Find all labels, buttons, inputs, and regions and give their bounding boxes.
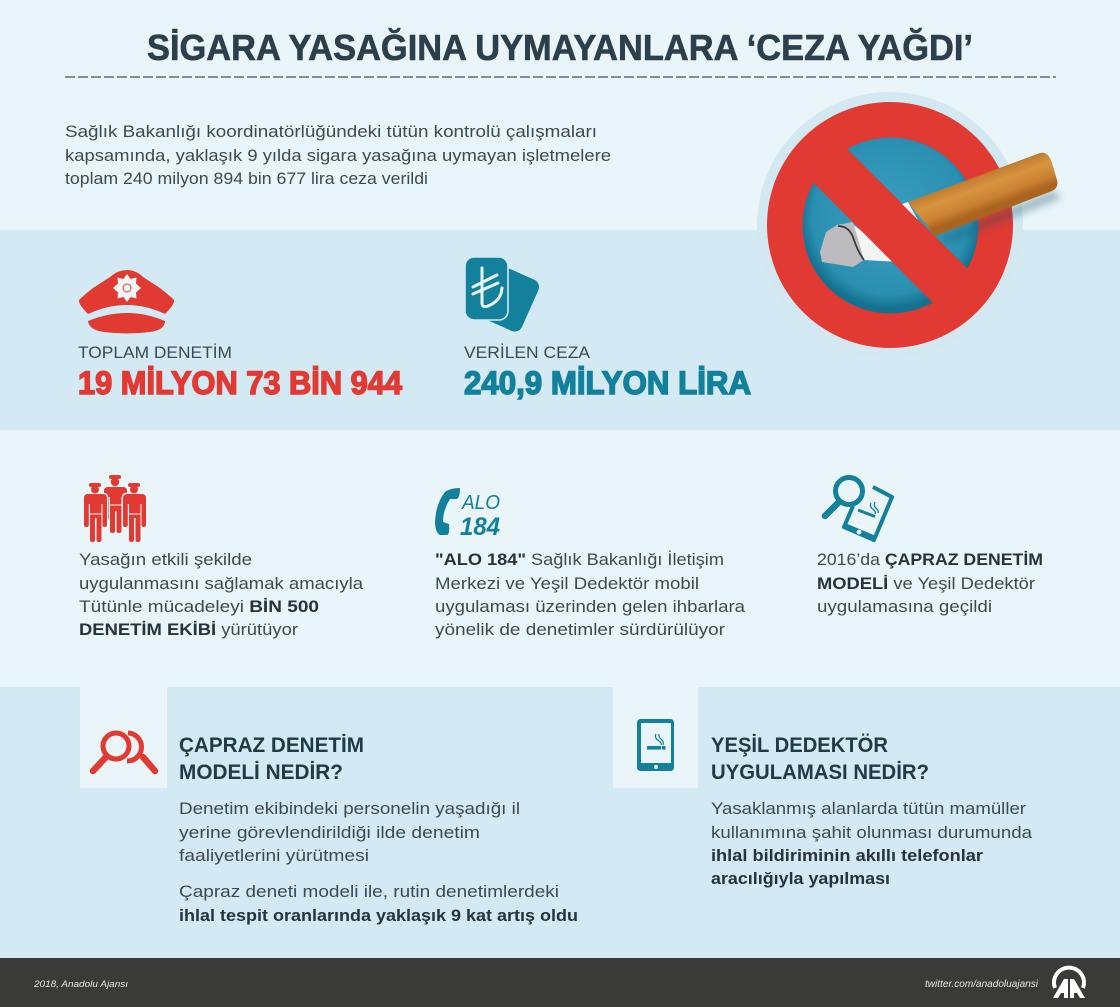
heading [711,734,929,784]
panel: green detector explanation [613,687,1033,888]
column: cross inspection [817,478,1043,616]
text [817,550,1043,616]
text: uygulanmasını sağlamak amacıyla [79,574,364,593]
heading: ÇAPRAZ DENETİM [179,734,364,757]
copyright: 2018, Anadolu Ajansı [33,979,128,990]
text: yönelik de denetimler sürdürülüyor [435,620,725,639]
icon: ALO 184 phone [435,488,500,541]
body text [179,799,578,925]
body text: Çapraz deneti modeli ile, rutin denetimlerdeki [179,882,559,901]
text: Yasağın etkili şekilde [79,550,252,569]
panel: top intro band [0,0,1120,230]
icon tab [80,687,167,788]
body text [711,799,1033,888]
icon: ALO 184 phone: 184 [460,513,500,541]
label: VERİLEN CEZA [464,343,591,362]
icon: magnifier over tablet [825,478,892,541]
number: 19 MİLYON 73 BİN 944 [78,365,402,401]
icon: three officers [84,475,146,542]
heading: YEŞİL DEDEKTÖR [711,734,888,757]
intro text: kapsamında, yaklaşık 9 yılda sigara yasağına uymayan işletmelere [65,146,611,165]
icon: smartphone with cigarette [637,719,674,771]
text: MODELİ ve Yeşil Dedektör [817,574,1035,593]
intro text: Sağlık Bakanlığı koordinatörlüğündeki tütün kontrolü çalışmaları [65,122,597,141]
body text: ihlal tespit oranlarında yaklaşık 9 kat artış oldu [179,906,578,925]
text: 2016’da ÇAPRAZ DENETİM [817,550,1043,569]
icon: lira notes [465,257,542,334]
body text: aracılığıyla yapılması [711,869,890,888]
intro text [65,122,611,188]
body text: yerine görevlendirildiği ilde denetim [179,823,480,842]
intro text: toplam 240 milyon 894 bin 677 lira ceza verildi [65,169,428,188]
text [435,550,746,639]
icon tab [613,687,698,788]
panel: explanations band [0,687,1120,958]
stat: total inspections [78,270,402,401]
panel: enforcement notes band [0,430,1120,687]
twitter handle: twitter.com/anadoluajansi [925,978,1039,990]
body text: ihlal bildiriminin akıllı telefonlar [711,846,983,865]
title: SİGARA YASAĞINA UYMAYANLARA ‘CEZA YAĞDI’ [147,27,973,68]
column: inspection teams [79,475,364,639]
stat: fines issued [464,257,751,401]
icon: double magnifier [93,733,155,771]
text: Merkezi ve Yeşil Dedektör mobil [435,574,699,593]
number: 240,9 MİLYON LİRA [464,365,751,401]
heading: UYGULAMASI NEDİR? [711,761,929,784]
body text: faaliyetlerini yürütmesi [179,846,369,865]
panel: cross inspection model explanation [80,687,578,925]
text: uygulaması üzerinden gelen ihbarlara [435,597,746,616]
heading: MODELİ NEDİR? [179,761,343,784]
text: uygulamasına geçildi [817,597,992,616]
text: Tütünle mücadeleyi BİN 500 [79,597,319,616]
body text: Denetim ekibindeki personelin yaşadığı il [179,799,520,818]
icon: ALO 184 phone: ALO [461,492,500,514]
body text: Yasaklanmış alanlarda tütün mamüller [711,799,1026,818]
icon: Anadolu Agency logo [1053,968,1085,998]
text [79,550,364,639]
heading [179,734,364,784]
body text: kullanımına şahit olunması durumunda [711,823,1033,842]
panel: statistics band [0,230,1120,430]
icon: police cap [79,270,174,334]
text: "ALO 184" Sağlık Bakanlığı İletişim [435,550,724,569]
text: DENETİM EKİBİ yürütüyor [79,620,298,639]
icon: no smoking sign [757,92,1062,358]
column: ALO 184 [435,488,746,639]
footer [0,958,1120,1007]
label: TOPLAM DENETİM [78,343,232,362]
